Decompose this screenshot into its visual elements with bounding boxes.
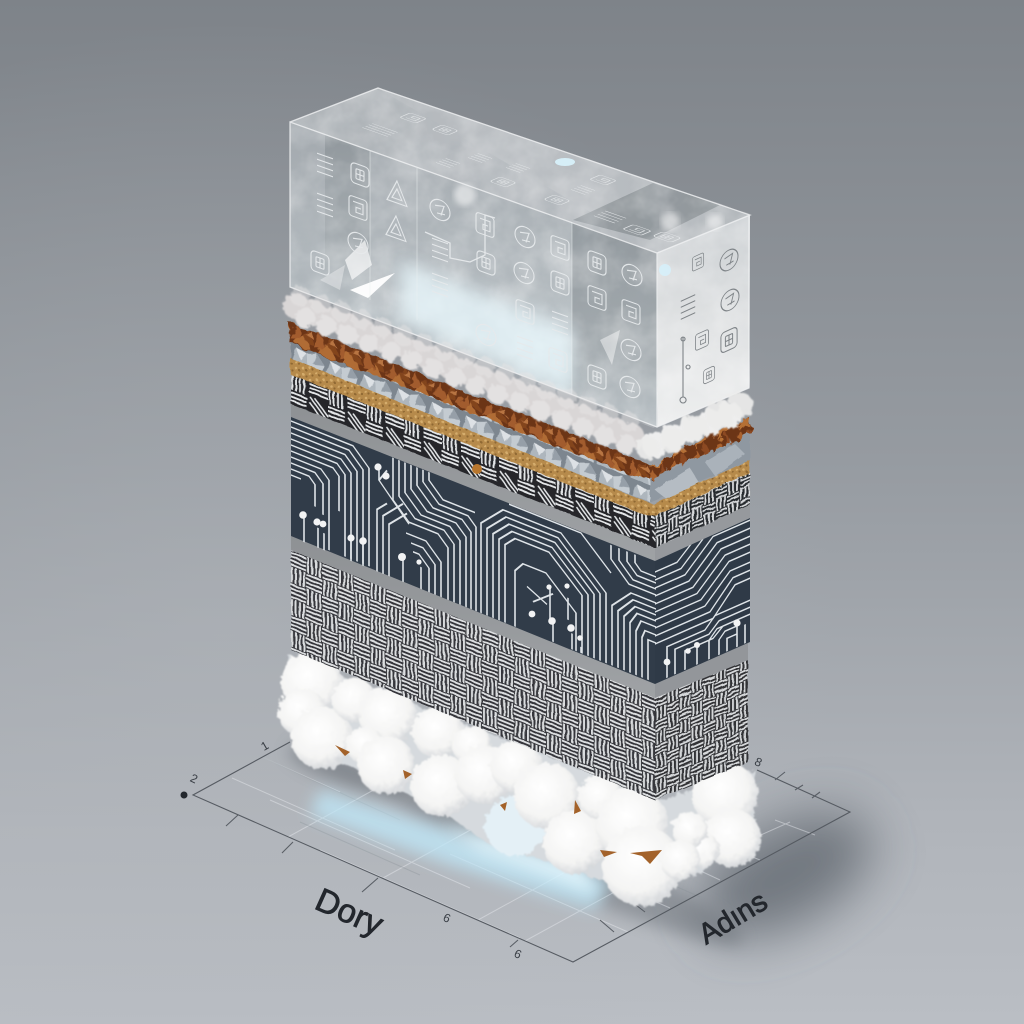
- blue light glow on floor: [310, 790, 610, 910]
- floor shadow: [284, 736, 892, 965]
- gold nugget: [472, 464, 482, 474]
- engraved icons top face: [362, 113, 681, 242]
- cotton under-mass: [284, 655, 755, 895]
- grey crystal layer: [291, 338, 750, 502]
- white fibre layer under the ice: [296, 306, 745, 450]
- circuit contact dots: [299, 463, 741, 665]
- transparent ice block: [290, 88, 750, 428]
- darker rear top section: [573, 183, 720, 240]
- edge highlights: [290, 88, 750, 427]
- front face: [290, 122, 657, 427]
- engraved icons front face: [311, 153, 642, 401]
- dark front section left: [325, 135, 370, 300]
- floor axes: [180, 742, 850, 962]
- axis tick labels: 2: [188, 771, 200, 787]
- copper flake layer: [288, 322, 750, 478]
- floor grid: [232, 757, 815, 941]
- axis tick labels: 6: [441, 910, 453, 926]
- grey band lower: [291, 535, 748, 698]
- dark front section right: [572, 222, 657, 427]
- engraved icons right face: [680, 246, 739, 403]
- axis tick labels: 8: [752, 754, 765, 770]
- shards: [320, 158, 723, 365]
- origin dot: [180, 792, 188, 798]
- cotton base layer: [278, 651, 761, 906]
- gold granular band: [290, 358, 750, 516]
- top face: [290, 88, 750, 253]
- grey band upper: [291, 403, 750, 561]
- dense pattern layer upper: [291, 372, 750, 548]
- fibres seen through the bottom of the ice: [300, 296, 645, 428]
- front circuit traces: [291, 417, 656, 683]
- right circuit traces: [655, 518, 750, 683]
- axis tick labels: 1: [258, 738, 271, 754]
- axis label: Dory: Dory: [310, 881, 389, 943]
- pale glow at bottom of front face: [400, 260, 572, 390]
- cotton seed husks: [335, 745, 662, 864]
- darker mottling in the ice: [291, 120, 658, 426]
- circuit layer: [291, 416, 750, 684]
- axis tick labels: 6: [512, 946, 524, 962]
- cloudy ice texture: [290, 88, 750, 428]
- axis label: Adıns: Adıns: [693, 885, 773, 951]
- weave layer lower: [291, 550, 748, 800]
- fibre mound in front of ice at corner: [636, 392, 753, 460]
- right face: [657, 215, 750, 427]
- axis tick labels: [188, 738, 765, 962]
